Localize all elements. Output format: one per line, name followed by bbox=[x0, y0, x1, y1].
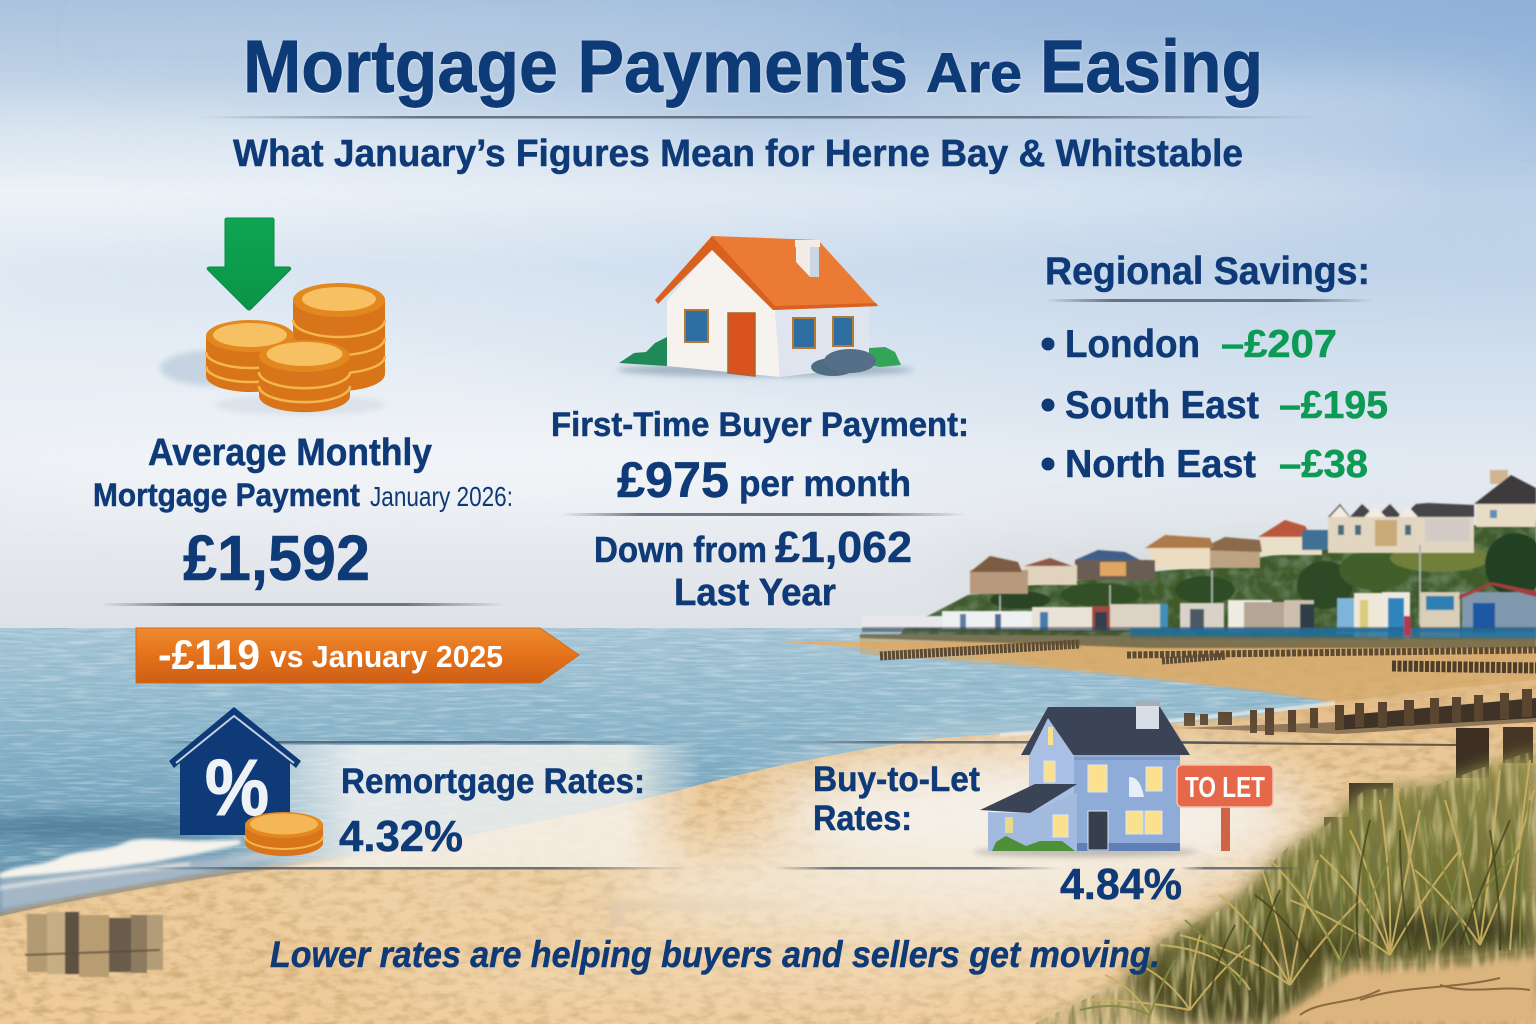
divider under first-time buyer payment bbox=[560, 513, 966, 516]
divider below lower rates row bbox=[135, 867, 1305, 870]
background: sea grass dune bbox=[1033, 750, 1536, 1024]
background: hillside and trees bbox=[900, 520, 1536, 640]
text block: buy-to-let rates label bbox=[813, 760, 980, 838]
text block: buy-to-let rates label: Buy-to-Let bbox=[813, 760, 980, 799]
background: sky bbox=[0, 0, 1536, 640]
list: regional savings figures: –£207 bbox=[1221, 323, 1337, 366]
text block: buy-to-let rates label: Rates: bbox=[813, 799, 912, 838]
icon: orange roof house bbox=[617, 236, 913, 377]
list: regional savings figures: –£38 bbox=[1279, 443, 1368, 486]
title: Mortgage Payments bbox=[243, 25, 908, 108]
background: timber groyne on the near beach bbox=[1178, 689, 1536, 735]
background: beach sand bbox=[0, 636, 1536, 1024]
background: beach huts row bbox=[862, 583, 1536, 640]
list: regional savings figures: London bbox=[1065, 323, 1200, 366]
text block: remortgage rates: Remortgage Rates: bbox=[341, 762, 645, 801]
list: regional savings figures: North East bbox=[1065, 443, 1256, 486]
callout ribbon: -£119 vs January 2025 bbox=[136, 628, 579, 683]
list: regional savings figures: South East bbox=[1065, 384, 1259, 427]
list: regional savings figures: –£195 bbox=[1279, 384, 1388, 427]
whitened sand behind buy-to-let area bbox=[260, 750, 1310, 999]
figure: buy-to-let rate: 4.84% bbox=[1060, 860, 1182, 909]
callout ribbon: -£119 vs January 2025: vs January 2025 bbox=[270, 639, 503, 674]
text block: first-time buyer payment: £975 bbox=[617, 452, 729, 508]
background: sea bbox=[0, 628, 1400, 918]
text block: down from last year: £1,062 bbox=[775, 523, 912, 572]
whitened text panel behind remortgage rates bbox=[210, 745, 700, 867]
text block: remortgage rates: 4.32% bbox=[339, 812, 463, 861]
subtitle: What January’s Figures Mean for Herne Bay & Whitstable bbox=[233, 133, 1243, 175]
text block: average monthly mortgage payment: January 2026: bbox=[370, 481, 513, 512]
heading: regional savings: Regional Savings: bbox=[1045, 250, 1370, 293]
text block: first-time buyer payment: First-Time Buyer Payment: bbox=[551, 406, 969, 444]
callout ribbon: -£119 vs January 2025: -£119 bbox=[158, 631, 260, 678]
list: regional savings figures bbox=[1042, 323, 1388, 486]
text block: first-time buyer payment: per month bbox=[739, 463, 911, 504]
icon: coin stacks bbox=[160, 283, 385, 415]
text block: down from last year: Down from bbox=[594, 529, 767, 570]
text block: first-time buyer payment bbox=[551, 406, 969, 508]
background: weathered wooden stump bbox=[25, 912, 163, 977]
text block: down from last year bbox=[594, 523, 912, 614]
title divider bbox=[200, 116, 1318, 118]
footer tagline: Lower rates are helping buyers and sellers get moving. bbox=[270, 934, 1160, 975]
background: dark timber posts near the dune bbox=[1090, 727, 1533, 841]
text block: average monthly mortgage payment: Average Monthly bbox=[148, 432, 432, 474]
divider under average payment bbox=[100, 603, 505, 606]
divider under regional savings bbox=[1045, 299, 1373, 302]
icon: house with percent sign and coin: % bbox=[205, 743, 269, 832]
text block: average monthly mortgage payment bbox=[93, 432, 513, 594]
icon: blue buy-to-let house bbox=[973, 701, 1197, 857]
icon: house with percent sign and coin bbox=[169, 707, 323, 856]
text block: average monthly mortgage payment: Mortgage Payment bbox=[93, 477, 360, 513]
background: timber groynes on the far beach bbox=[860, 634, 1536, 668]
text block: average monthly mortgage payment: £1,592 bbox=[183, 522, 370, 594]
sign: to let: TO LET bbox=[1185, 772, 1265, 804]
text block: remortgage rates bbox=[339, 762, 645, 861]
title: Are bbox=[926, 41, 1022, 104]
divider above lower rates row bbox=[145, 741, 1305, 744]
text block: down from last year: Last Year bbox=[674, 572, 836, 614]
sign: to let bbox=[1177, 765, 1273, 851]
background: seafront town houses bbox=[970, 470, 1536, 625]
title bbox=[243, 25, 1263, 108]
icon: green down arrow bbox=[207, 218, 291, 310]
title: Easing bbox=[1040, 25, 1263, 108]
